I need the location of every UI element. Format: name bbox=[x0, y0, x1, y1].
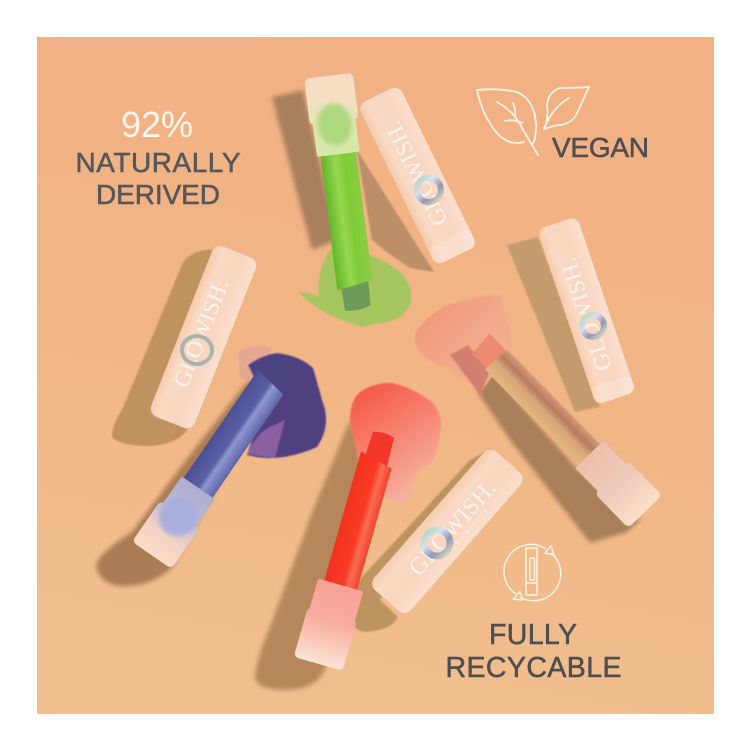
cap: left bbox=[148, 243, 259, 431]
label: fully recyclable bbox=[446, 619, 622, 684]
smear: purple bbox=[238, 346, 326, 458]
cast shadows bbox=[96, 90, 640, 690]
cap: bottom bbox=[368, 446, 526, 617]
cap logo: left: GLOWISH. bbox=[169, 276, 234, 391]
cap: right bbox=[537, 216, 636, 405]
lipstick: green bbox=[304, 73, 382, 313]
smear: peach bbox=[415, 295, 512, 395]
lipstick: peach bbox=[463, 327, 662, 528]
cap: top centre bbox=[357, 85, 477, 266]
icon: vegan leaves bbox=[477, 87, 589, 155]
smear: red bbox=[350, 383, 441, 503]
cap logo: bottom: GLOWISH. bbox=[404, 475, 501, 581]
lipstick: red bbox=[294, 426, 409, 671]
cap logo: top centre: GLOWISH. bbox=[380, 117, 452, 230]
headline: 92% naturally derived bbox=[76, 104, 241, 210]
icon: recycle bbox=[504, 544, 561, 601]
headline: 92% naturally derived: NATURALLY bbox=[76, 147, 241, 178]
cap logo: right: GLOWISH. bbox=[555, 254, 617, 374]
smear: green bbox=[298, 245, 411, 327]
label: fully recyclable: RECYCABLE bbox=[446, 652, 622, 684]
cap logo: bottom: HUDA BEAUTY bbox=[447, 507, 491, 556]
headline: 92% naturally derived: DERIVED bbox=[96, 179, 220, 210]
lipstick: blue bbox=[132, 346, 306, 569]
headline: 92% naturally derived: 92% bbox=[121, 104, 193, 145]
label: vegan: VEGAN bbox=[552, 132, 649, 163]
label: fully recyclable: FULLY bbox=[489, 619, 577, 651]
